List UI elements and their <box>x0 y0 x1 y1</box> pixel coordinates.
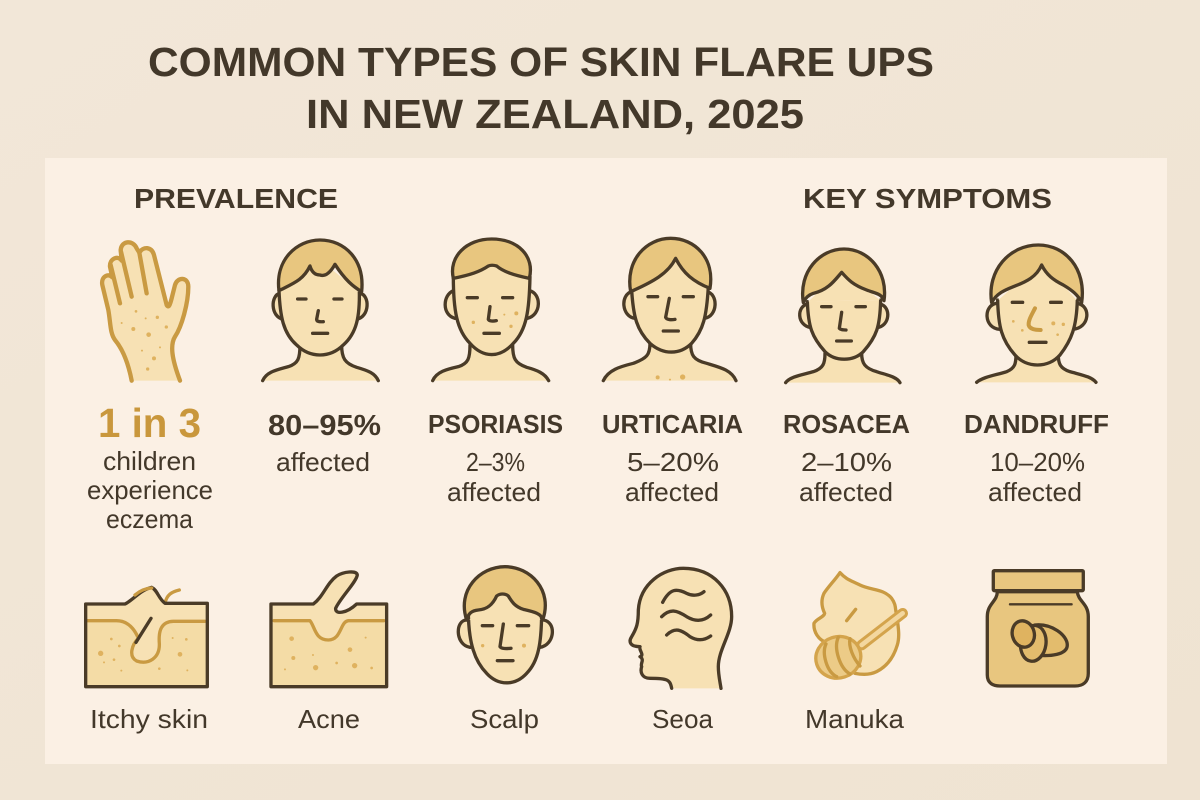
icon: jar with nuts <box>987 571 1088 686</box>
icon: itchy skin diagram <box>86 587 207 687</box>
label: manuka: Manuka <box>805 704 905 734</box>
stat: rosacea: ROSACEA <box>783 409 910 439</box>
stat: psoriasis <box>428 409 563 507</box>
stat: dandruff: 10–20% <box>990 447 1085 477</box>
stat: rosacea <box>783 409 910 507</box>
icon: face rosacea <box>786 249 900 383</box>
stat: urticaria: 5–20% <box>627 447 719 477</box>
label: scalp: Scalp <box>470 704 539 734</box>
stat: rosacea: 2–10% <box>801 447 892 477</box>
title: COMMON TYPES OF SKIN FLARE UPS <box>148 39 934 85</box>
stat: urticaria: URTICARIA <box>602 409 743 439</box>
icon: manuka honey dipper <box>810 573 903 684</box>
icon: head profile with waves <box>630 568 732 688</box>
stat: 1 in 3 children experience eczema: 1 in 3 <box>98 400 201 446</box>
icon: face 80–95% <box>263 240 378 381</box>
title: IN NEW ZEALAND, 2025 <box>306 91 804 137</box>
icon: face psoriasis <box>433 239 549 381</box>
heading: key symptoms: KEY SYMPTOMS <box>803 183 1052 214</box>
stat: dandruff: DANDRUFF <box>964 409 1109 439</box>
icon: hand with eczema <box>102 242 188 381</box>
stat: 1 in 3 children experience eczema: experience <box>87 475 213 505</box>
icon: face dandruff <box>977 245 1096 382</box>
title <box>148 39 934 137</box>
stat: urticaria <box>602 409 743 507</box>
stat: 1 in 3 children experience eczema: eczema <box>106 504 194 534</box>
panel: content card <box>45 158 1167 764</box>
icon: acne skin diagram <box>271 572 387 687</box>
stat: dandruff: affected <box>988 477 1082 507</box>
stat: rosacea: affected <box>799 477 893 507</box>
stat: psoriasis: PSORIASIS <box>428 409 563 439</box>
label: itchy skin: Itchy skin <box>90 704 208 734</box>
icon: scalp face <box>458 567 552 683</box>
icon: face urticaria <box>603 238 736 381</box>
stat: 80–95% affected: affected <box>276 447 370 477</box>
stat: 80–95% affected: 80–95% <box>268 410 381 442</box>
label: seoa: Seoa <box>652 704 714 734</box>
heading: prevalence: PREVALENCE <box>134 183 338 214</box>
stat: urticaria: affected <box>625 477 719 507</box>
label: acne: Acne <box>298 704 360 734</box>
stat: 1 in 3 children experience eczema: children <box>103 446 196 476</box>
stat: dandruff <box>964 409 1109 507</box>
stat: 1 in 3 children experience eczema <box>87 400 213 534</box>
stat: psoriasis: affected <box>447 477 541 507</box>
stat: 80–95% affected <box>268 410 381 477</box>
stat: psoriasis: 2–3% <box>466 447 525 477</box>
